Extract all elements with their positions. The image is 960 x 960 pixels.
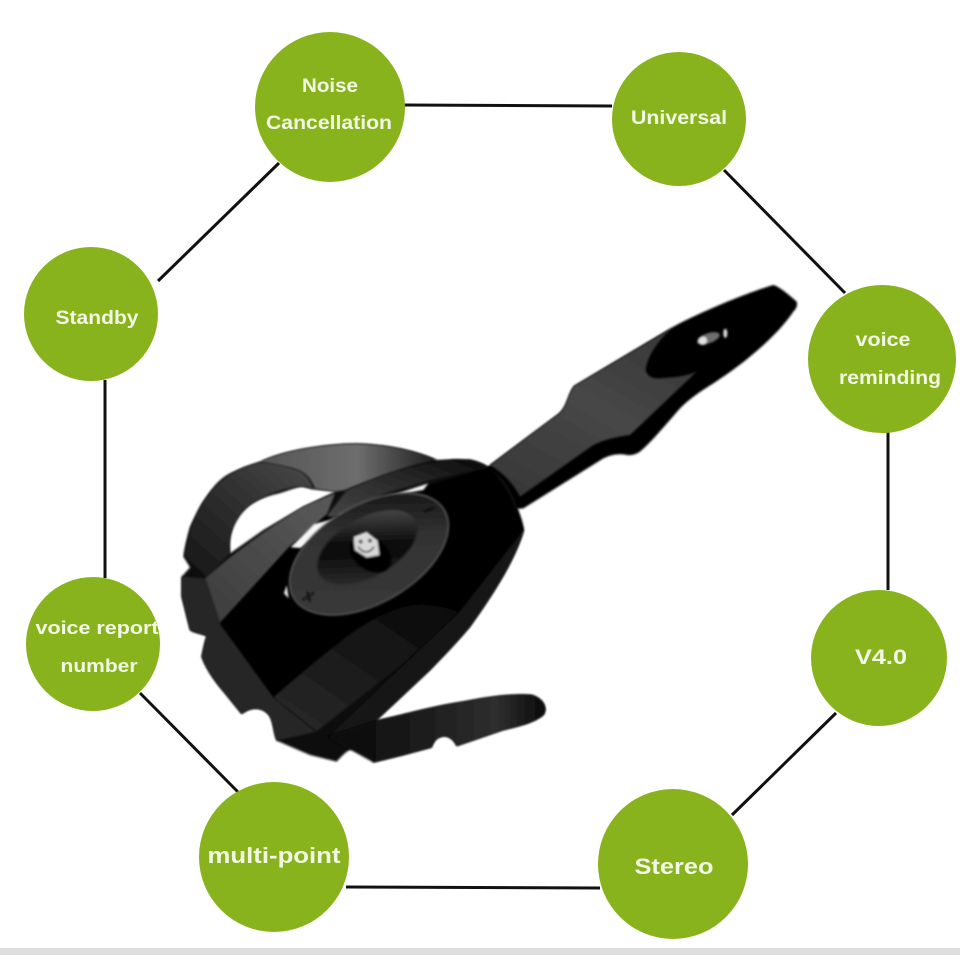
badge: voice reminding: voice [856, 330, 910, 351]
plate marks [303, 507, 434, 602]
lower grey panel [273, 605, 458, 732]
microphone stem [327, 695, 545, 762]
headset product [182, 285, 797, 762]
badge: V4.0 [811, 590, 947, 726]
inner dish [305, 494, 430, 600]
speaker lens [695, 329, 727, 347]
badge: Universal [612, 52, 746, 186]
badge: Stereo: Stereo [634, 854, 714, 879]
badge: voice report number: voice report [36, 617, 158, 638]
upper band [327, 459, 488, 517]
badge: Standby [24, 247, 158, 381]
grey wedge [205, 493, 335, 623]
rim shade [182, 577, 317, 741]
boom grey face [490, 328, 697, 497]
badge: voice report number [26, 577, 160, 711]
black centre [220, 467, 523, 732]
badge: V4.0: V4.0 [855, 646, 907, 669]
badge: Noise Cancellation: Noise [302, 76, 358, 97]
badge: Universal: Universal [631, 108, 727, 129]
ear hook and body silhouette [182, 443, 545, 762]
white gaps [284, 483, 428, 598]
badge: multi-point: multi-point [208, 843, 341, 868]
hook shade [185, 462, 313, 577]
badge: voice report number: number [60, 655, 138, 676]
badge: Noise Cancellation [255, 32, 405, 182]
hook top band [261, 444, 437, 492]
boom arm [480, 285, 797, 510]
logo button [343, 528, 398, 580]
badge: multi-point [199, 782, 349, 932]
connector lines [105, 105, 888, 888]
outer edge shade [330, 530, 524, 735]
control plate [269, 468, 469, 640]
badge: voice reminding [808, 285, 956, 433]
badge: Standby: Standby [56, 308, 139, 329]
badge: Noise Cancellation: Cancellation [266, 113, 392, 134]
badge: Stereo [598, 789, 748, 939]
badge: voice reminding: reminding [839, 368, 941, 389]
